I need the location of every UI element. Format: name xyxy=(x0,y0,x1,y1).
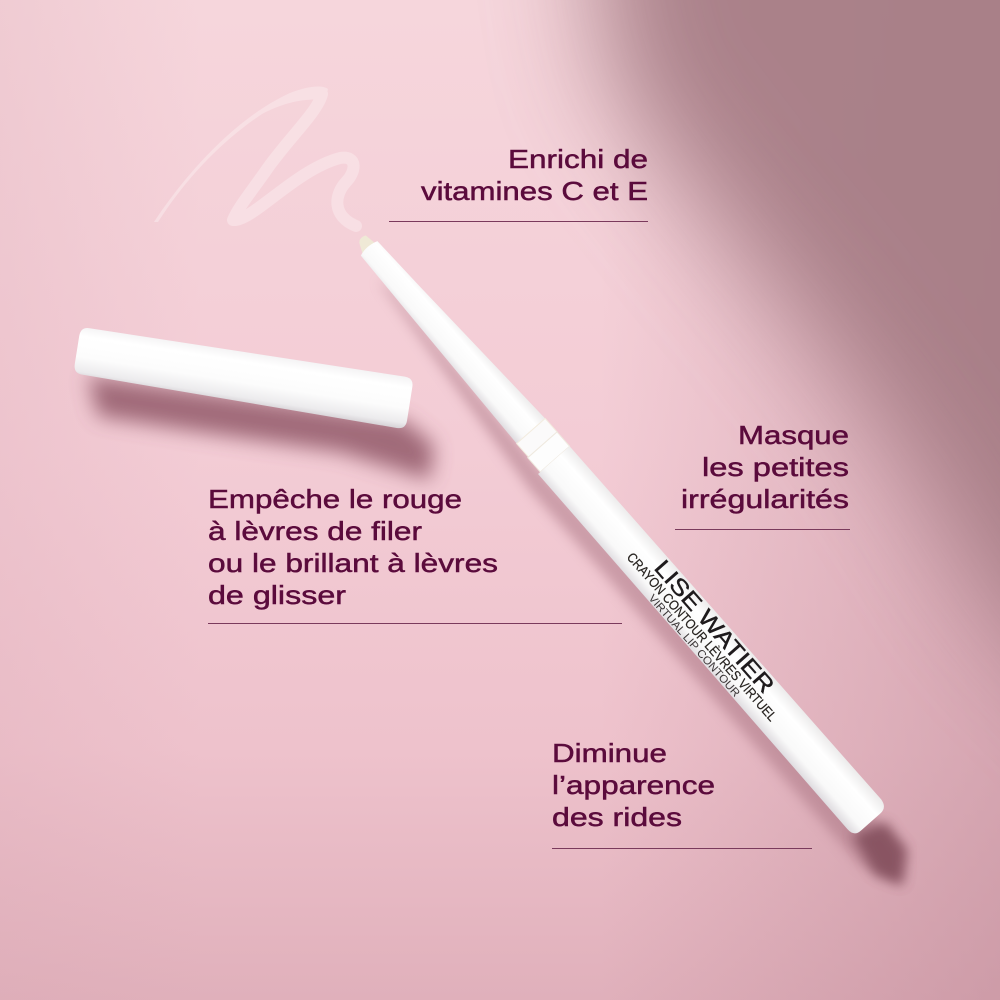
product name fr: CRAYON CONTOUR LÈVRES VIRTUEL xyxy=(624,550,780,724)
callout: prevents bleeding: Empêche le rouge xyxy=(208,484,462,514)
callout: prevents bleeding xyxy=(208,484,622,624)
callout: wrinkles: Diminue xyxy=(552,738,667,768)
callout: wrinkles: l’apparence xyxy=(552,770,715,800)
pencil xyxy=(342,223,889,837)
pencil narrow barrel xyxy=(354,234,545,444)
lip liner swatch xyxy=(154,86,356,226)
callout: prevents bleeding: à lèvres de filer xyxy=(208,516,422,546)
pencil tip xyxy=(354,233,376,255)
callout: prevents bleeding: de glisser xyxy=(208,580,346,610)
pencil shadow xyxy=(378,280,908,885)
product name en: VIRTUAL LIP CONTOUR xyxy=(646,592,742,700)
callout: irregularities: Masque xyxy=(738,420,849,450)
pencil cap xyxy=(73,325,414,429)
brand name: LISE WATIER xyxy=(649,555,780,698)
callout: irregularities: les petites xyxy=(702,452,849,482)
callout: vitamins: vitamines C et E xyxy=(421,176,648,206)
callout: vitamins xyxy=(389,144,648,222)
callout: wrinkles xyxy=(552,738,812,849)
pencil ring xyxy=(528,432,570,472)
pencil body xyxy=(537,446,888,837)
callout: irregularities xyxy=(675,420,850,530)
callout: irregularities: irrégularités xyxy=(681,484,849,514)
pencil collar xyxy=(517,418,557,457)
callout: prevents bleeding: ou le brillant à lèvres xyxy=(208,548,498,578)
callout: vitamins: Enrichi de xyxy=(508,144,648,174)
callout: wrinkles: des rides xyxy=(552,802,682,832)
cap shadow xyxy=(88,376,434,480)
